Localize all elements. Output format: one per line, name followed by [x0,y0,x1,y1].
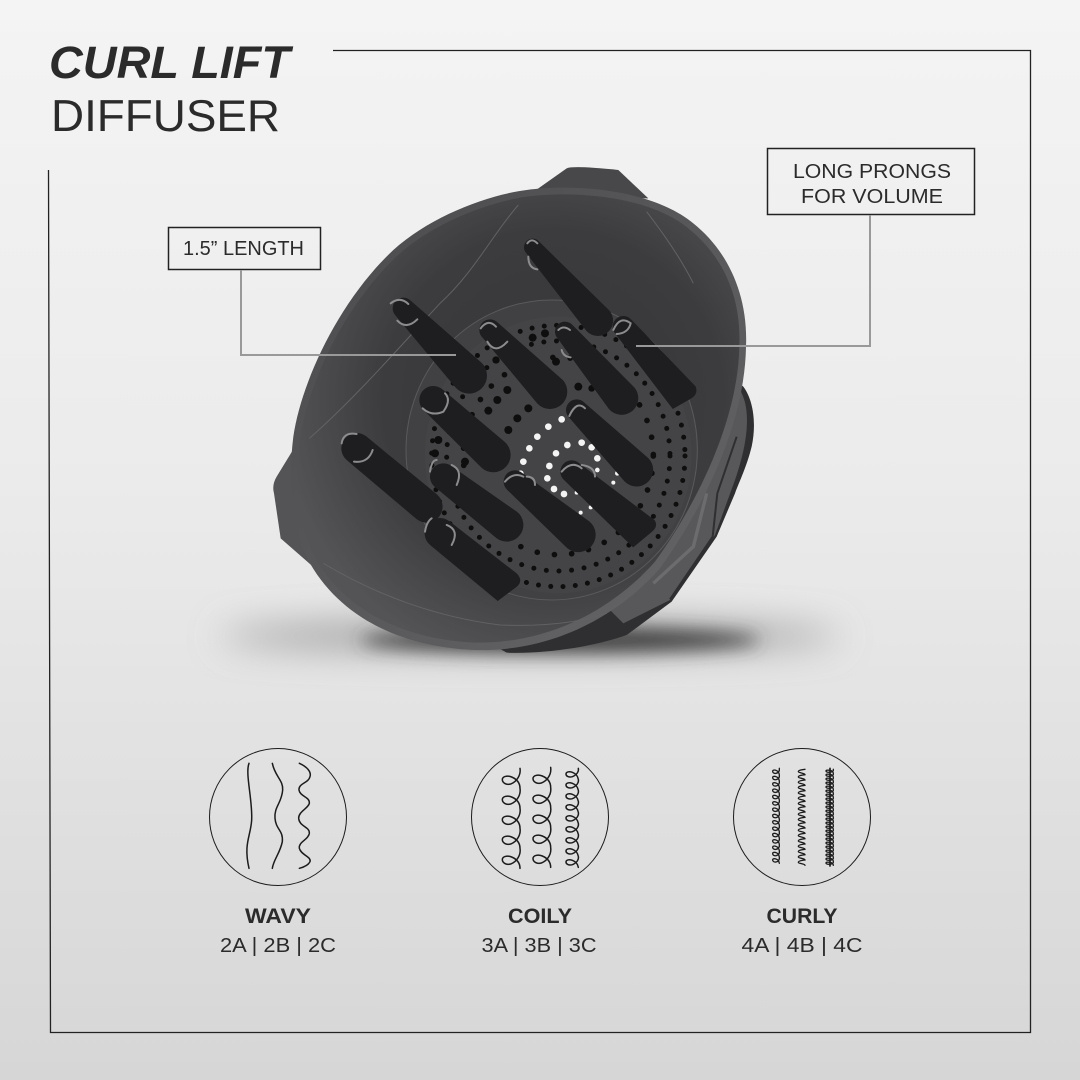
prong 6 [411,378,518,479]
icon: wavy hair [210,748,346,886]
label: curly: CURLY [766,905,838,928]
callout: long prongs for volume: FOR VOLUME [801,186,943,208]
top tab [527,167,648,198]
body facet band [593,390,747,623]
leader line: length [241,270,456,355]
prong tips [342,240,631,545]
prong 3 [470,310,574,416]
bowl body [460,373,754,653]
ground shadow [220,623,840,652]
prong 8 [335,426,449,529]
prong 5 [604,308,700,412]
title [49,37,294,141]
prong 10 [495,461,603,559]
label: curly [742,905,862,957]
icon: coily hair [472,748,608,886]
hole rings [432,325,685,587]
perforated plate [406,300,697,600]
leader line: volume [636,215,870,346]
callout: 1.5 inch length: 1.5” LENGTH [183,238,304,260]
bowl interior [298,194,740,643]
callout: long prongs for volume: LONG PRONGS [793,161,951,183]
title: CURL LIFT [49,37,294,88]
left tab [273,447,315,568]
label: curly: 4A | 4B | 4C [742,935,862,957]
prong 4 [546,313,645,422]
prong 11 [552,451,659,550]
label: wavy: WAVY [245,905,311,928]
label: wavy [220,905,336,957]
prong 7 [557,391,660,493]
label: coily: COILY [508,905,572,928]
label: coily: 3A | 3B | 3C [482,935,596,957]
callout: 1.5 inch length [168,228,320,270]
label: coily [482,905,596,957]
callout: long prongs for volume [768,148,974,214]
white center holes [518,416,620,515]
body facet edges [653,437,737,599]
prongs [335,231,700,605]
icon: curly hair [734,748,870,886]
interior ribs [309,205,693,625]
prong 2 [383,288,494,401]
product: curl lift diffuser bowl [273,167,754,653]
title: DIFFUSER [51,92,280,141]
prong 1 [515,231,619,342]
prong 9 [423,455,530,548]
outer rim [291,188,746,650]
label: wavy: 2A | 2B | 2C [220,935,336,957]
upper black holes [431,329,595,466]
prong 12 [418,511,523,605]
